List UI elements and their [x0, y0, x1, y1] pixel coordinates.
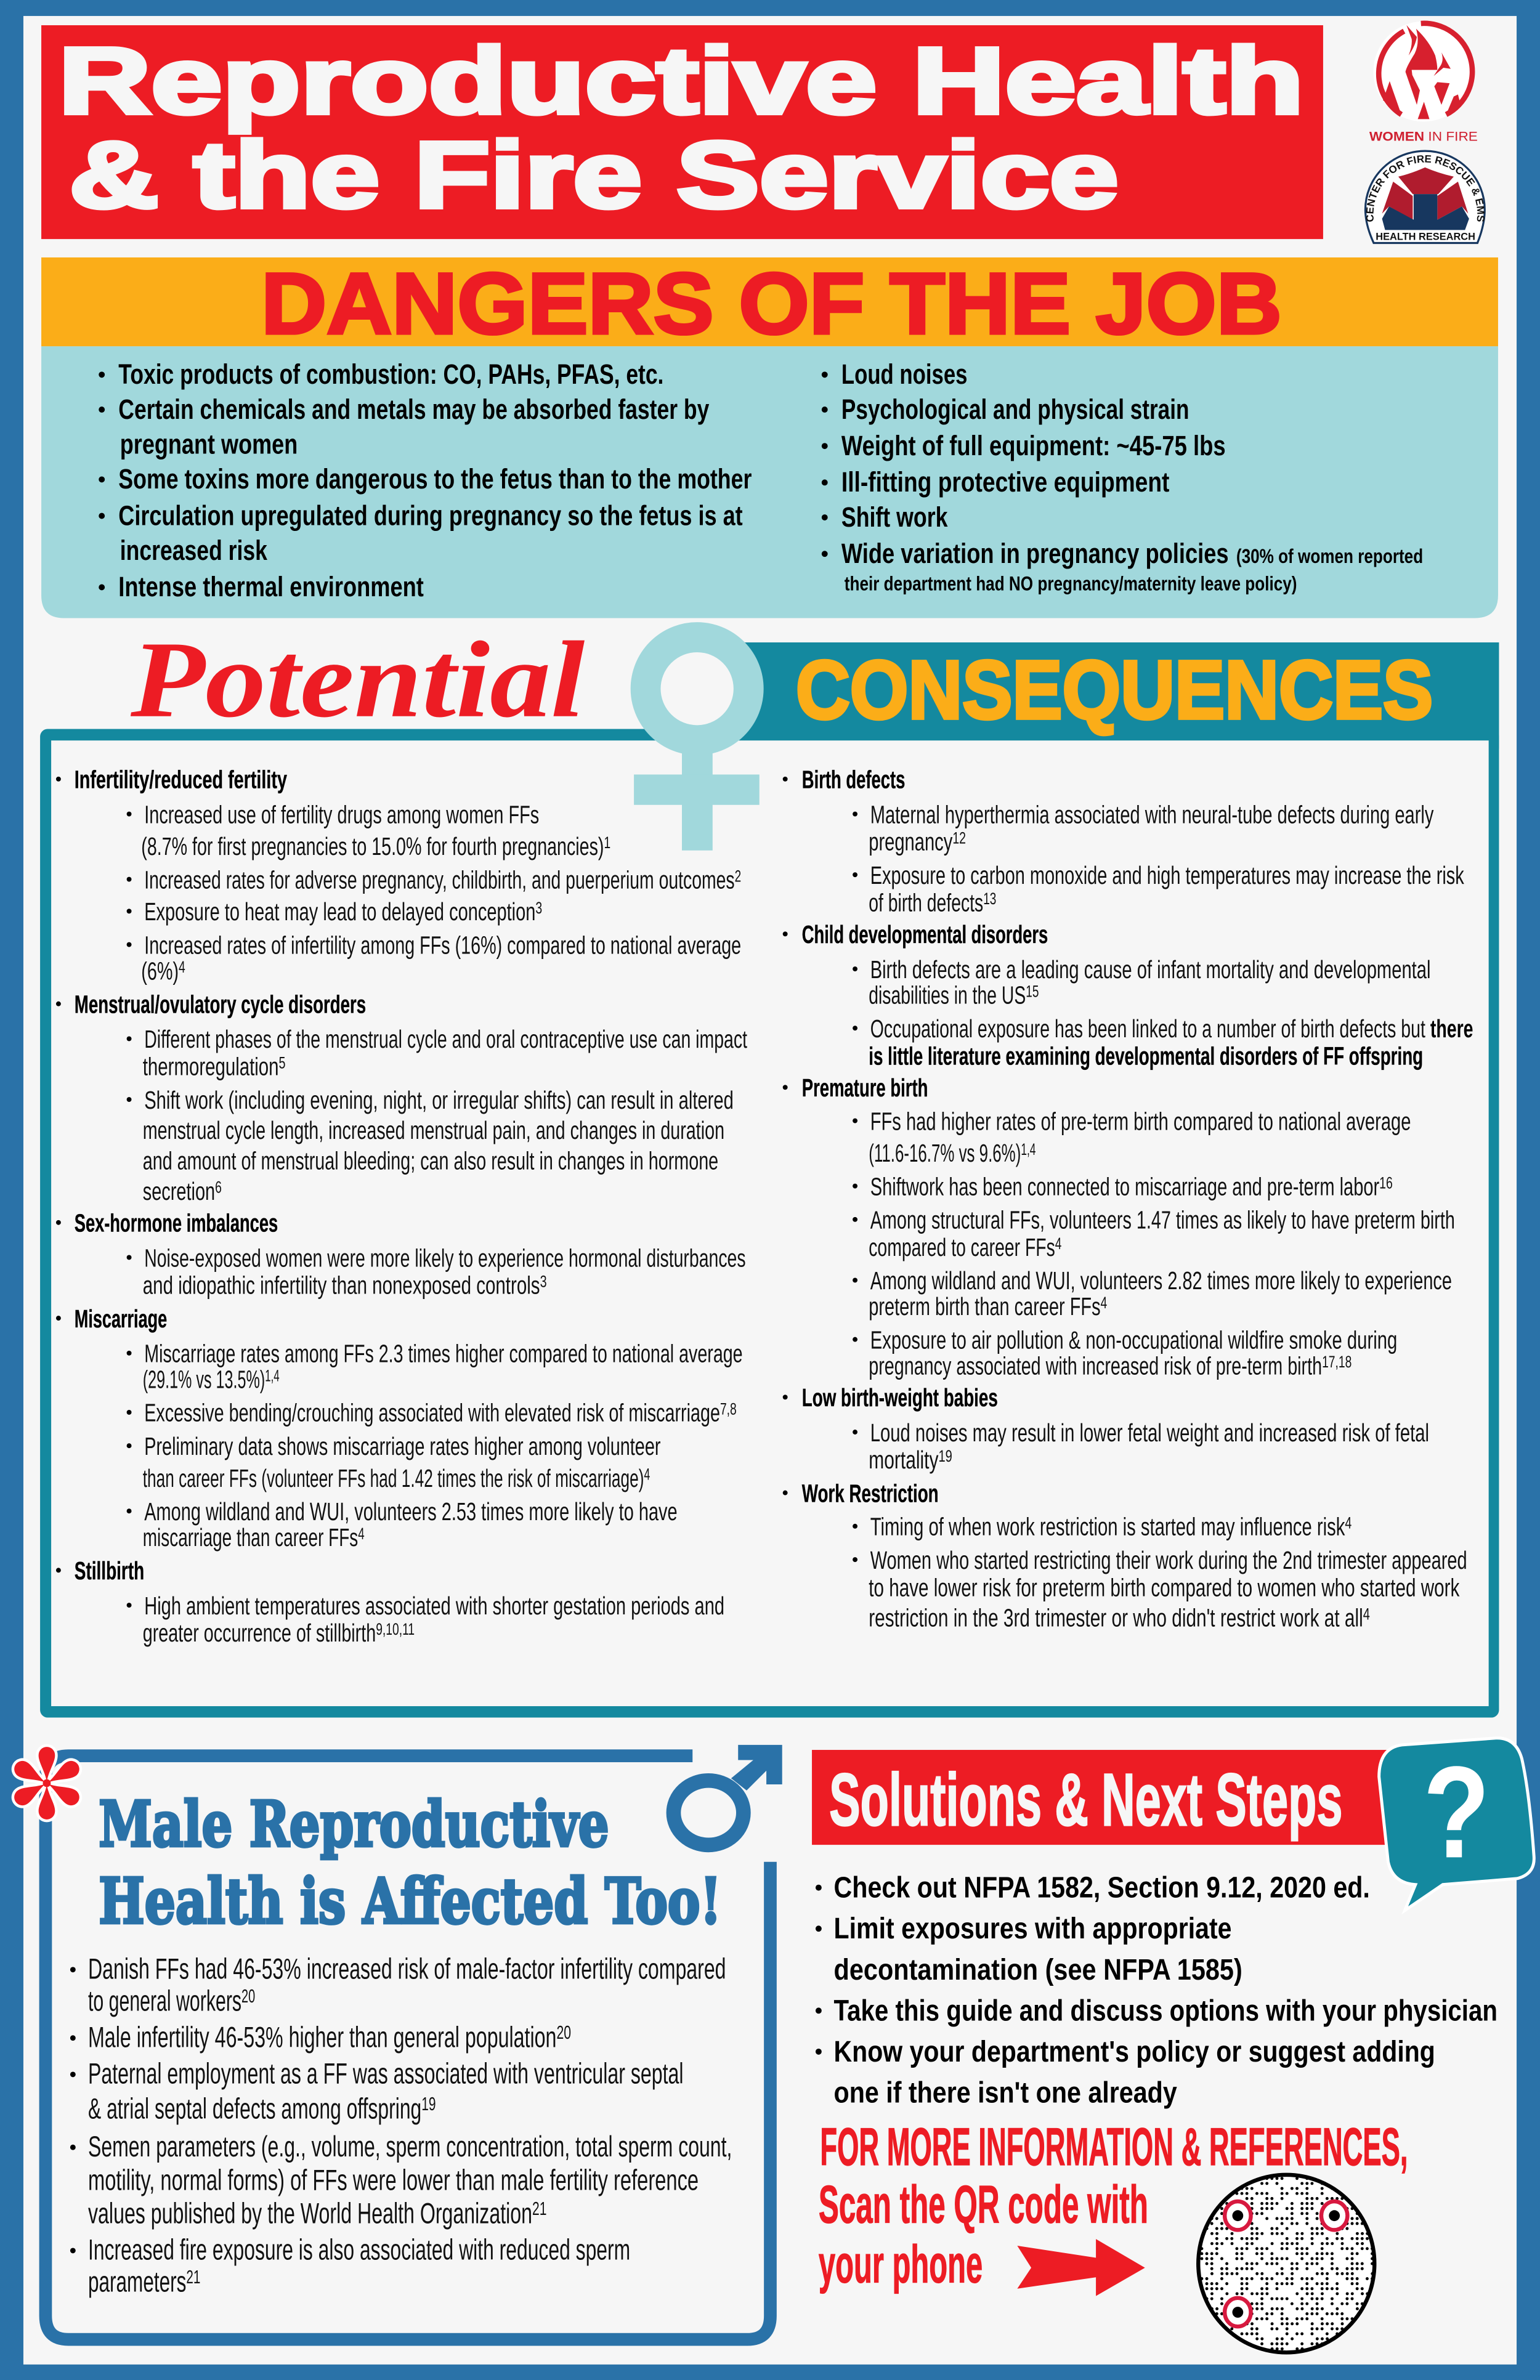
list: dangers left column: Some toxins more dangerous to the fetus than to the mother — [118, 463, 752, 495]
section: work restriction: 4 — [1363, 1604, 1370, 1623]
list: dangers left column — [99, 358, 752, 602]
logo: Center for Fire Rescue & EMS Health Research: HEALTH RESEARCH — [1376, 232, 1475, 243]
section: low birth-weight babies: Low birth-weight babies — [802, 1383, 998, 1412]
section: miscarriage — [56, 1305, 743, 1552]
section: miscarriage: than career FFs (volunteer FFs had 1.42 times the risk of miscarriage) — [143, 1464, 915, 1492]
section: menstrual disorders: Shift work (including evening, night, or irregular shifts) can result in altered — [144, 1086, 734, 1114]
section: low birth-weight babies: mortality — [869, 1446, 963, 1474]
section: premature birth: preterm birth than career FFs — [869, 1292, 1193, 1321]
section: miscarriage: 1,4 — [265, 1366, 280, 1385]
heading: consequences: CONSEQUENCES — [796, 644, 1433, 736]
section: infertility: 1 — [604, 833, 610, 852]
section: infertility: 4 — [179, 957, 185, 976]
section: infertility: Increased rates for adverse pregnancy, childbirth, and puerperium outcomes — [144, 865, 986, 894]
callout: more information: Scan the QR code with — [819, 2176, 1148, 2235]
panel: male reproductive health — [46, 1756, 770, 2339]
section: child developmental disorders: 15 — [1026, 982, 1039, 1001]
section: sex-hormone imbalances: 3 — [540, 1272, 547, 1291]
section: premature birth: Premature birth — [802, 1074, 928, 1102]
icon: male symbol — [673, 1745, 782, 1845]
section: low birth-weight babies: 19 — [938, 1446, 952, 1465]
section: infertility: 3 — [535, 898, 542, 917]
section: premature birth: 1,4 — [1021, 1139, 1035, 1159]
section: birth defects — [783, 766, 1464, 917]
section: work restriction: Work Restriction — [802, 1479, 939, 1507]
list: dangers left column: Intense thermal environment — [118, 571, 424, 602]
panel: consequences — [40, 642, 1499, 1718]
section: menstrual disorders: thermoregulation — [143, 1053, 330, 1081]
section: child developmental disorders: Child developmental disorders — [802, 920, 1048, 949]
icon: question mark speech bubble: ? — [1423, 1739, 1490, 1885]
section: miscarriage: 4 — [644, 1465, 650, 1484]
list: male reproductive findings: motility, normal forms) of FFs were lower than male fertility reference — [88, 2164, 699, 2196]
list: male reproductive findings: 19 — [421, 2093, 436, 2115]
heading: solutions and next steps — [812, 1750, 1395, 1845]
section: menstrual disorders: Different phases of the menstrual cycle and oral contraceptive use can impact — [144, 1025, 747, 1053]
section: menstrual disorders: 6 — [215, 1178, 222, 1197]
list: dangers right column: Psychological and physical strain — [841, 394, 1189, 425]
logo: Center for Fire Rescue & EMS Health Research: CENTER FOR FIRE RESCUE & EMS — [1366, 155, 1485, 222]
section: premature birth: compared to career FFs — [869, 1233, 1135, 1261]
section: sex-hormone imbalances — [56, 1209, 746, 1300]
section: sex-hormone imbalances: Sex-hormone imbalances — [75, 1209, 278, 1237]
list: male reproductive findings: Semen parameters (e.g., volume, sperm concentration, total sperm count, — [88, 2131, 732, 2163]
list: dangers left column: increased risk — [120, 535, 267, 566]
list: male reproductive findings: values published by the World Health Organization — [88, 2198, 736, 2230]
heading: male reproductive health: Health is Affected Too! — [99, 1864, 721, 1938]
section: birth defects: pregnancy — [869, 828, 985, 856]
title banner: Reproductive Health — [59, 29, 1304, 134]
section: work restriction: 4 — [1345, 1513, 1352, 1532]
section: birth defects: 13 — [983, 889, 996, 908]
list: solutions: decontamination (see NFPA 1585) — [834, 1953, 1242, 1986]
section: miscarriage: (29.1% vs 13.5%) — [143, 1365, 339, 1393]
list: dangers left column: pregnant women — [120, 428, 298, 459]
list: male reproductive findings: to general workers — [88, 1985, 325, 2017]
section: miscarriage: 7,8 — [720, 1399, 737, 1419]
list: dangers right column: (30% of women reported — [1236, 545, 1423, 567]
list: solutions: Know your department's policy or suggest adding — [834, 2035, 1435, 2068]
section: miscarriage: Preliminary data shows miscarriage rates higher among volunteer — [144, 1432, 660, 1460]
section: stillbirth: greater occurrence of stillbirth — [143, 1619, 471, 1647]
section: miscarriage: Miscarriage rates among FFs 2.3 times higher compared to national average — [144, 1340, 743, 1368]
section: stillbirth: 9,10,11 — [376, 1619, 415, 1638]
section: birth defects: of birth defects — [869, 888, 1032, 917]
list: solutions: Limit exposures with appropriate — [834, 1912, 1232, 1945]
list: dangers left column: Toxic products of combustion: CO, PAHs, PFAS, etc. — [118, 358, 663, 390]
section: work restriction: restriction in the 3rd trimester or who didn't restrict work at all — [869, 1604, 1539, 1632]
list: male reproductive findings: 21 — [532, 2198, 547, 2219]
section: work restriction — [783, 1479, 1467, 1632]
section: premature birth: 17,18 — [1322, 1352, 1352, 1371]
section: infertility: Exposure to heat may lead to delayed conception — [144, 897, 690, 926]
heading: Potential: Potential — [130, 620, 585, 740]
section: premature birth: pregnancy associated with increased risk of pre-term birth — [869, 1351, 1507, 1380]
list: male reproductive findings: Paternal employment as a FF was associated with ventricular septal — [88, 2058, 683, 2090]
logo: Women in Fire — [1369, 22, 1478, 144]
section: infertility: (6%) — [141, 957, 194, 985]
section: premature birth — [783, 1074, 1455, 1380]
section: infertility: Increased use of fertility drugs among women FFs — [144, 800, 539, 828]
list: male reproductive findings: parameters — [88, 2265, 234, 2297]
section: miscarriage: 4 — [358, 1524, 365, 1543]
section: infertility: Increased rates of infertility among FFs (16%) compared to national average — [144, 931, 741, 959]
callout: more information — [819, 2118, 1408, 2294]
section: infertility: (8.7% for first pregnancies to 15.0% for fourth pregnancies) — [141, 832, 795, 860]
list: male reproductive findings: 20 — [556, 2022, 571, 2043]
list: dangers right column: Weight of full equipment: ~45-75 lbs — [841, 430, 1226, 461]
list: dangers right column — [822, 358, 1423, 594]
list: dangers right column: Shift work — [841, 501, 948, 533]
section: infertility: Infertility/reduced fertility — [75, 766, 287, 794]
title banner — [41, 25, 1323, 239]
section: low birth-weight babies — [783, 1383, 1429, 1474]
section: premature birth: 4 — [1055, 1234, 1061, 1253]
section: birth defects: 12 — [952, 828, 966, 848]
section: menstrual disorders: menstrual cycle length, increased menstrual pain, and changes in duration — [143, 1116, 724, 1144]
heading: male reproductive health — [99, 1787, 721, 1938]
logo text: Women in Fire: WOMEN IN FIRE — [1369, 129, 1478, 144]
list: male reproductive findings: Increased fire exposure is also associated with reduced sperm — [88, 2234, 630, 2266]
section: sex-hormone imbalances: and idiopathic infertility than nonexposed controls — [143, 1271, 687, 1300]
list: dangers right column: Ill-fitting protective equipment — [841, 466, 1169, 498]
section: sex-hormone imbalances: Noise-exposed women were more likely to experience hormonal disturbances — [144, 1244, 746, 1272]
heading: male reproductive health: Male Reproductive — [99, 1787, 609, 1861]
section: menstrual disorders — [56, 990, 747, 1205]
section: work restriction: Timing of when work restriction is started may influence risk — [870, 1513, 1526, 1541]
icon: red asterisk — [11, 1747, 83, 1819]
section: stillbirth: Stillbirth — [75, 1556, 144, 1585]
arrow: points to QR code — [1017, 2239, 1145, 2296]
list: dangers right column: their department had NO pregnancy/maternity leave policy) — [845, 572, 1297, 594]
icon: question mark speech bubble — [1379, 1738, 1534, 1911]
section: premature birth: 16 — [1379, 1173, 1393, 1192]
list: solutions — [816, 1871, 1497, 2110]
list: male reproductive findings — [70, 1953, 732, 2297]
section: miscarriage: Among wildland and WUI, volunteers 2.53 times more likely to have — [144, 1497, 678, 1526]
title banner: & the Fire Service — [69, 123, 1119, 228]
icon: female symbol — [634, 638, 760, 851]
section: premature birth: 4 — [1101, 1293, 1107, 1312]
section: menstrual disorders: and amount of menstrual bleeding; can also result in changes in hormone — [143, 1146, 718, 1175]
section: menstrual disorders: 5 — [279, 1053, 286, 1072]
list: solutions: Check out NFPA 1582, Section 9.12, 2020 ed. — [834, 1871, 1370, 1904]
section: stillbirth — [56, 1556, 724, 1647]
QR code — [1192, 2175, 1377, 2352]
list: male reproductive findings: Danish FFs had 46-53% increased risk of male-factor infertility compared — [88, 1953, 726, 1985]
section: infertility: 2 — [735, 866, 741, 885]
list: dangers right column: Loud noises — [841, 358, 968, 390]
list: dangers left column: Circulation upregulated during pregnancy so the fetus is at — [118, 500, 743, 531]
section: miscarriage: Miscarriage — [75, 1305, 167, 1333]
list: dangers left column: Certain chemicals and metals may be absorbed faster by — [118, 394, 710, 425]
heading: dangers of the job: DANGERS OF THE JOB — [261, 255, 1282, 352]
section: child developmental disorders — [783, 920, 1473, 1070]
list: male reproductive findings: & atrial septal defects among offspring — [88, 2092, 578, 2124]
list: dangers right column: Wide variation in pregnancy policies — [841, 538, 1229, 569]
list: male reproductive findings: 20 — [241, 1985, 255, 2007]
section: miscarriage: miscarriage than career FFs — [143, 1523, 454, 1552]
list: male reproductive findings: 21 — [186, 2266, 200, 2288]
section: infertility — [56, 766, 741, 985]
section: stillbirth: High ambient temperatures associated with shorter gestation periods and — [144, 1592, 724, 1620]
section: menstrual disorders: Menstrual/ovulatory cycle disorders — [75, 990, 366, 1019]
section: child developmental disorders: disabilities in the US — [869, 981, 1093, 1010]
section: premature birth: (11.6-16.7% vs 9.6%) — [869, 1139, 1106, 1167]
list: male reproductive findings: Male infertility 46-53% higher than general population — [88, 2022, 769, 2054]
panel: dangers of the job — [41, 255, 1498, 618]
section: birth defects: Birth defects — [802, 766, 905, 794]
list: solutions: one if there isn't one already — [834, 2076, 1177, 2110]
section: menstrual disorders: secretion — [143, 1177, 244, 1205]
callout: more information: your phone — [819, 2235, 983, 2294]
section: miscarriage: Excessive bending/crouching associated with elevated risk of miscarriage — [144, 1399, 954, 1427]
